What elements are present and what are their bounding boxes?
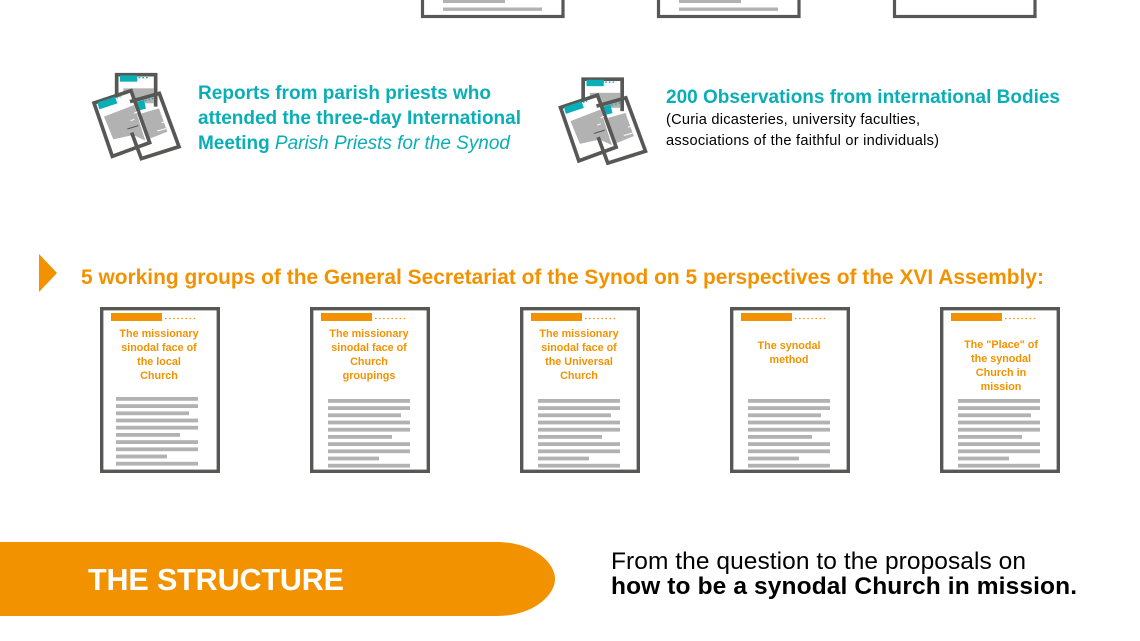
document: synodal method: method [770,354,808,366]
document: Church groupings: Church [350,356,388,368]
document: Universal Church: Church [560,370,598,382]
text: reports from parish priests [198,83,521,154]
document: local Church: sinodal face of [121,342,197,354]
icon: stacked documents, international bodies [560,79,645,163]
document: Universal Church: the Universal [545,356,613,368]
banner: the structure: THE STRUCTURE [88,563,344,597]
document: place of the synodal Church [942,309,1058,471]
banner: the structure [0,542,555,616]
partial document: top right [894,0,1035,16]
document: Universal Church: sinodal face of [541,342,617,354]
document: Church groupings: sinodal face of [331,342,407,354]
icon: stacked documents, parish priests [94,75,179,159]
document: Church groupings: groupings [343,370,395,382]
document: place of the synodal Church: the synodal [971,353,1031,365]
document: local Church [102,309,218,471]
document: synodal method: The synodal [758,340,820,352]
document: place of the synodal Church: The "Place" of [964,339,1038,351]
text: 200 observations [666,87,1060,149]
text: reports from parish priests: Reports from parish priests who [198,83,491,104]
text: reports from parish priests: Meeting Parish Priests for the Synod [198,133,511,154]
partial document: top left [422,0,563,16]
document: synodal method [732,309,848,471]
document: Universal Church [522,309,638,471]
document: Universal Church: The missionary [539,328,619,340]
text: 200 observations: associations of the faithful or individuals) [666,133,939,149]
heading: working groups: 5 working groups of the General Secretariat of the Synod on 5 perspectives of the XVI Assembly: [81,266,1044,289]
text: 200 observations: (Curia dicasteries, university faculties, [666,112,920,128]
document: local Church: the local [137,356,181,368]
partial document: top centre [658,0,799,16]
arrow: section marker [39,254,57,292]
document: Church groupings: The missionary [329,328,409,340]
text: reports from parish priests: attended the three-day International [198,108,521,129]
document: local Church: The missionary [119,328,199,340]
document: Church groupings [312,309,428,471]
text: from the question to the proposals [611,548,1077,600]
text: 200 observations: 200 Observations from international Bodies [666,87,1060,108]
text: from the question to the proposals: From the question to the proposals on [611,548,1026,575]
text: from the question to the proposals: how to be a synodal Church in mission. [611,573,1077,600]
document: place of the synodal Church: mission [981,381,1021,393]
document: place of the synodal Church: Church in [976,367,1026,379]
document: local Church: Church [140,370,178,382]
